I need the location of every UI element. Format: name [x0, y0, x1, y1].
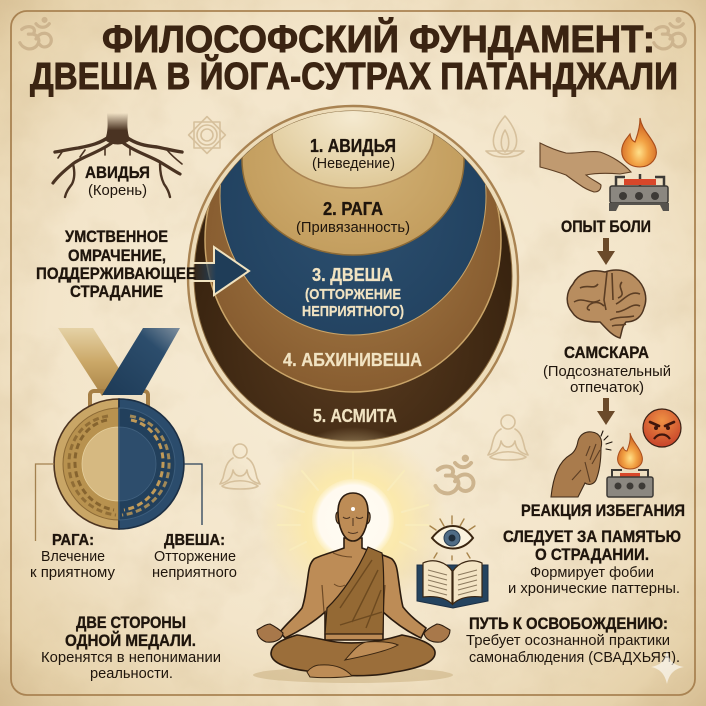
icon: eye of self-observation [430, 516, 475, 560]
text: layer 2: 2. РАГА [323, 199, 383, 219]
crossed legs [271, 635, 435, 676]
decorative om top left [20, 18, 51, 49]
icon: roots of ignorance [53, 113, 182, 197]
decorative om lower centre [435, 457, 473, 493]
text: mental obscuration: УМСТВЕННОЕ [65, 227, 168, 246]
left hand [257, 624, 283, 642]
text: two sides of one medal [41, 613, 221, 682]
text: layer 1 [310, 136, 396, 172]
text: follows memory of suffering: СЛЕДУЕТ ЗА ПАМЯТЬЮ [503, 527, 681, 546]
chest marks [333, 553, 352, 586]
right hand [424, 624, 450, 642]
icon: brain [567, 270, 646, 338]
diagram: five nested kleshas [186, 104, 520, 450]
leader line right [184, 464, 202, 525]
robe folds [340, 560, 382, 628]
layer 1: avidya [272, 111, 434, 189]
label: samskara: (Подсознательный [543, 363, 671, 380]
arrow down to brain [597, 238, 615, 265]
text: layer 1: (Неведение) [312, 155, 395, 172]
medal [54, 328, 184, 529]
icon: hand near stove [540, 118, 669, 211]
forehead dot [351, 507, 355, 511]
laurel wreath right [122, 416, 169, 515]
label: samskara [543, 343, 671, 396]
leader line left [36, 464, 54, 541]
torso and arms [280, 538, 426, 640]
text: mental obscuration: ПОДДЕРЖИВАЮЩЕЕ [36, 264, 196, 283]
text: path to liberation: ПУТЬ К ОСВОБОЖДЕНИЮ: [469, 614, 668, 633]
stove [609, 174, 669, 211]
sparkle watermark [651, 650, 684, 684]
medal blue half [119, 399, 184, 529]
label: samskara: САМСКАРА [564, 343, 649, 362]
text: follows memory of suffering: О СТРАДАНИИ. [535, 545, 649, 564]
text: layer 3: 3. ДВЕША [312, 265, 393, 285]
text: layer 4: 4. АБХИНИВЕША [283, 350, 422, 370]
label: avidya root: (Корень) [88, 182, 147, 199]
icon: second flame and stove [607, 433, 653, 497]
label: dvesha: ДВЕША: [164, 532, 225, 549]
text: path to liberation: Требует осознанной практики [466, 632, 670, 649]
text: follows memory of suffering: и хронические паттерны. [508, 580, 680, 597]
text: two sides of one medal: ДВЕ СТОРОНЫ [76, 613, 186, 632]
icon: recoiling person [551, 431, 612, 497]
text: layer 2: (Привязанность) [296, 219, 410, 236]
label: raga [30, 532, 115, 581]
label: raga: к приятному [30, 564, 115, 581]
decorative meditator outline right [488, 415, 528, 460]
title [30, 16, 678, 98]
text: two sides of one medal: ОДНОЙ МЕДАЛИ. [65, 631, 196, 650]
text: path to liberation [466, 614, 680, 666]
decorative om top right [654, 18, 685, 49]
ground shadow [253, 667, 453, 683]
clasp [90, 391, 148, 413]
text: layer 3: (ОТТОРЖЕНИЕ [305, 286, 401, 303]
glow [258, 427, 448, 617]
text: path to liberation: самонаблюдения (СВАДХЬЯЯ). [469, 649, 680, 666]
rays [278, 452, 428, 550]
layer 5: asmita [194, 111, 512, 441]
text: layer 1: 1. АВИДЬЯ [310, 136, 396, 156]
layer 3: dvesha [220, 111, 486, 336]
label: dvesha: неприятного [152, 564, 237, 581]
label: dvesha: Отторжение [154, 548, 236, 565]
arrow into dvesha [192, 247, 249, 295]
text: layer 3: НЕПРИЯТНОГО) [302, 303, 404, 320]
hand [540, 143, 631, 192]
text: mental obscuration: ОМРАЧЕНИЕ, [68, 246, 166, 265]
text: mental obscuration [36, 227, 196, 301]
label: avidya root: АВИДЬЯ [85, 163, 150, 182]
text: layer 3 [302, 265, 404, 320]
decorative meditator outline left [220, 444, 260, 489]
text: mental obscuration: СТРАДАНИЕ [70, 282, 163, 301]
icon: open book [417, 561, 488, 608]
robe sash [325, 547, 384, 634]
label: experience of pain: ОПЫТ БОЛИ [561, 217, 651, 236]
decorative flame lotus [486, 116, 524, 157]
face [343, 517, 363, 534]
lower foot [307, 665, 352, 678]
text: follows memory of suffering: Формирует фобии [530, 564, 654, 581]
decorative eight-point star [189, 117, 225, 153]
flame [622, 118, 656, 167]
figure: meditating monk [253, 427, 453, 683]
label: avidya root [85, 163, 150, 199]
ears [336, 512, 370, 524]
icon: angry face [643, 409, 681, 447]
arrow down to reaction [597, 398, 615, 425]
text: two sides of one medal: реальности. [90, 665, 173, 682]
text: layer 2 [296, 199, 410, 236]
halo [312, 479, 394, 561]
label: raga: Влечение [41, 548, 105, 565]
arm gaps [322, 585, 385, 612]
gold ribbon [58, 328, 125, 396]
text: follows memory of suffering [503, 527, 681, 597]
head [338, 493, 368, 541]
medal gold half [54, 399, 119, 529]
text: two sides of one medal: Коренятся в непонимании [41, 649, 221, 666]
label: samskara: отпечаток) [570, 379, 644, 396]
upper foot [345, 642, 398, 660]
title: ФИЛОСОФСКИЙ ФУНДАМЕНТ: [102, 16, 655, 61]
layer 2: raga [241, 111, 465, 256]
label: raga: РАГА: [52, 532, 94, 549]
blue ribbon [102, 328, 180, 395]
label: dvesha [152, 532, 237, 581]
layer 4: abhinivesha [204, 186, 502, 393]
outer ring [188, 106, 518, 448]
text: layer 5: 5. АСМИТА [313, 406, 397, 426]
laurel wreath left [69, 416, 116, 515]
